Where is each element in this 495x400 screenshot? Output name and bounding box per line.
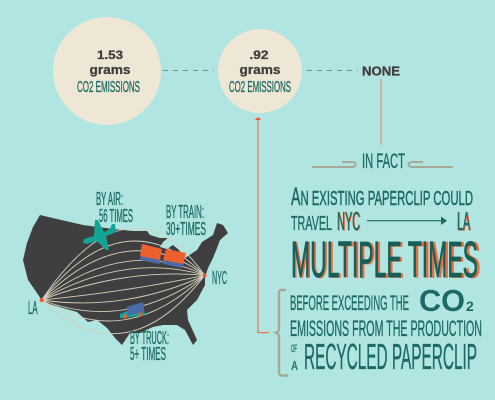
- text: travel nyc to la: NYC: [337, 206, 360, 236]
- label: none: NONE: [362, 64, 400, 78]
- text: BY TRAIN:: [166, 202, 204, 222]
- circle: 1.53 grams: 1.53: [97, 48, 123, 62]
- text: LA: [457, 206, 470, 236]
- circle: .92 grams: CO2 EMISSIONS: [229, 79, 291, 96]
- label: by air: BY AIR:: [96, 189, 123, 209]
- circle: .92 grams: grams: [240, 62, 280, 77]
- circle: .92 grams: .92: [250, 48, 269, 62]
- text: NYC: [212, 268, 227, 288]
- map: united states: [23, 215, 228, 345]
- text: 56 TIMES: [99, 206, 133, 226]
- text: travel nyc to la: TRAVEL: [291, 213, 332, 235]
- text: of a recycled paperclip: A: [292, 358, 298, 373]
- circle: 1.53 grams: grams: [90, 62, 130, 77]
- bracket: [276, 290, 288, 376]
- heading: in fact: [312, 150, 453, 173]
- circle: .92 grams: [218, 29, 302, 113]
- arrow: recycled paperclip to .92 grams: [255, 117, 269, 333]
- text: 30+TIMES: [166, 219, 206, 239]
- text: before exceeding the co2: 2: [466, 298, 474, 314]
- text: LA: [28, 298, 38, 318]
- text: 5+ TIMES: [130, 344, 166, 364]
- text: of a recycled paperclip: OF: [291, 343, 297, 355]
- icon: truck: [120, 302, 145, 318]
- text: BY TRUCK:: [130, 328, 169, 348]
- marker: la: [40, 298, 44, 302]
- text: LA: [458, 206, 471, 236]
- text: before exceeding the co2: [290, 283, 474, 318]
- marker: nyc: [203, 273, 207, 277]
- text: before exceeding the co2: CO: [419, 283, 465, 318]
- routes: la to nyc: [42, 228, 205, 334]
- icon: plane: [83, 220, 116, 250]
- label: by train: [166, 202, 206, 239]
- text: travel nyc to la: [291, 206, 471, 236]
- icon: train: [140, 244, 186, 268]
- label: by air: [96, 189, 133, 226]
- circle: 1.53 grams: CO2 EMISSIONS: [77, 79, 140, 96]
- label: by truck: [130, 328, 169, 364]
- heading: in fact: IN FACT: [362, 150, 405, 173]
- circle: 1.53 grams: [53, 17, 161, 125]
- text: travel nyc to la: NYC: [338, 206, 361, 236]
- connector: none to in fact: [380, 79, 382, 145]
